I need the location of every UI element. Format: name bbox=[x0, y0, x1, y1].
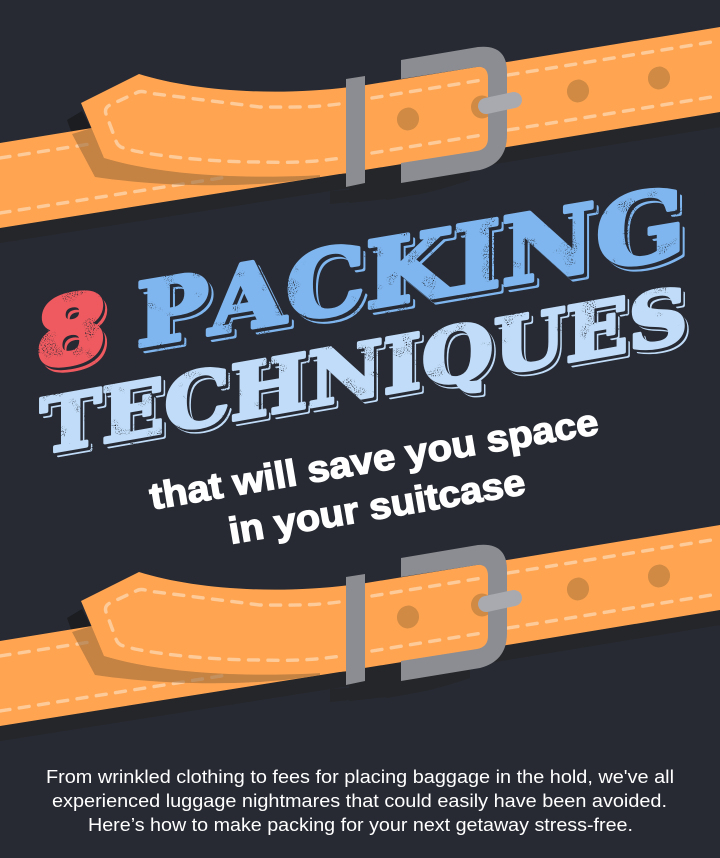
buckle prong bbox=[486, 100, 514, 106]
buckle shadow bbox=[386, 100, 470, 200]
tip shadow on background bbox=[67, 609, 92, 632]
title word PACKING: PACKING bbox=[136, 165, 686, 370]
intro paragraph: experienced luggage nightmares that could easily have been avoided. bbox=[52, 790, 667, 811]
buckle prong bbox=[486, 598, 514, 604]
buckle frame bbox=[401, 47, 507, 183]
belt tip bbox=[81, 74, 350, 177]
title numeral 8: 8 bbox=[33, 271, 110, 392]
subtitle: that will save you space bbox=[147, 401, 601, 517]
intro paragraph: Here’s how to make packing for your next getaway stress-free. bbox=[88, 814, 633, 835]
tip stitching bbox=[106, 590, 341, 660]
tip shadow on strap bbox=[72, 598, 320, 683]
buckle shadow bbox=[386, 598, 470, 698]
belt strap bbox=[0, 525, 720, 726]
belt holes bbox=[394, 63, 673, 134]
tip shadow on strap bbox=[72, 100, 320, 185]
strap stitching bbox=[0, 539, 718, 711]
belt keeper bbox=[346, 76, 365, 187]
subtitle bbox=[147, 401, 609, 564]
tip stitching bbox=[106, 92, 341, 162]
intro paragraph: From wrinkled clothing to fees for placing baggage in the hold, we've all bbox=[46, 766, 674, 787]
buckle frame bbox=[401, 545, 507, 681]
title speckle texture bbox=[38, 190, 684, 452]
title word TECHNIQUES: TECHNIQUES bbox=[40, 270, 688, 472]
belt strap bbox=[0, 27, 720, 228]
belt shadow bbox=[0, 610, 720, 741]
tip shadow on background bbox=[67, 111, 92, 134]
strap stitching bbox=[0, 41, 718, 213]
subtitle: in your suitcase bbox=[225, 461, 528, 552]
belt shadow bbox=[0, 112, 720, 243]
belt keeper bbox=[346, 574, 365, 685]
bottom belt illustration bbox=[0, 525, 720, 741]
intro paragraph bbox=[46, 766, 674, 835]
belt holes bbox=[394, 561, 673, 632]
belt tip bbox=[81, 572, 350, 675]
